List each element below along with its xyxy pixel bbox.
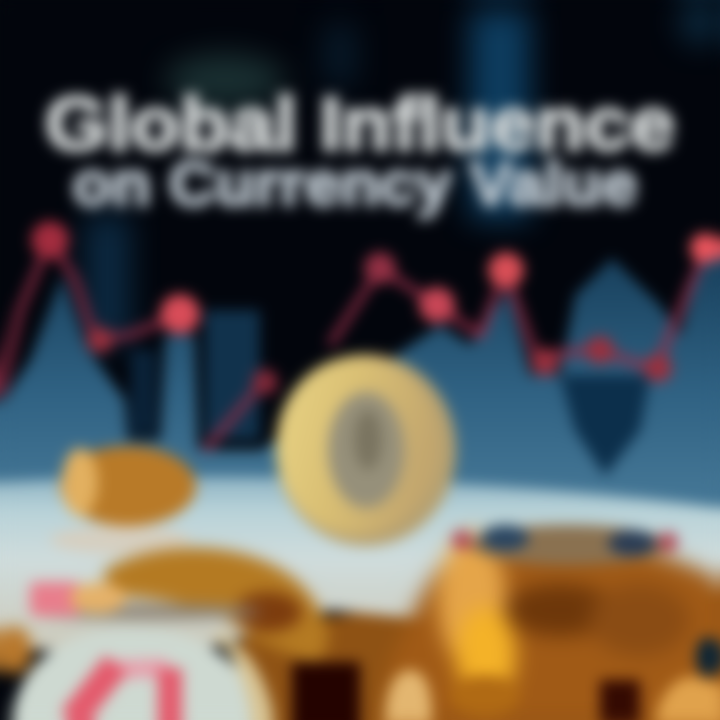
central gold coin [276,354,456,546]
title [45,82,675,219]
red label patch [30,582,126,616]
pale foreground coins [385,670,720,720]
dark foreground gaps [292,637,720,720]
background glows [85,0,720,345]
title: on Currency Value [72,150,638,219]
lower foreground base [240,560,720,720]
title: Global Influence [45,82,675,167]
left coin stack [50,446,196,554]
white badge [12,628,274,720]
area chart [0,245,720,540]
right gold coin pile [380,532,720,720]
red badge symbol [72,664,170,720]
red chart markers [31,221,720,395]
foreground coins left [0,548,328,674]
red trend line [0,240,705,450]
light floor [0,477,720,650]
top of right coin stack [452,525,678,565]
